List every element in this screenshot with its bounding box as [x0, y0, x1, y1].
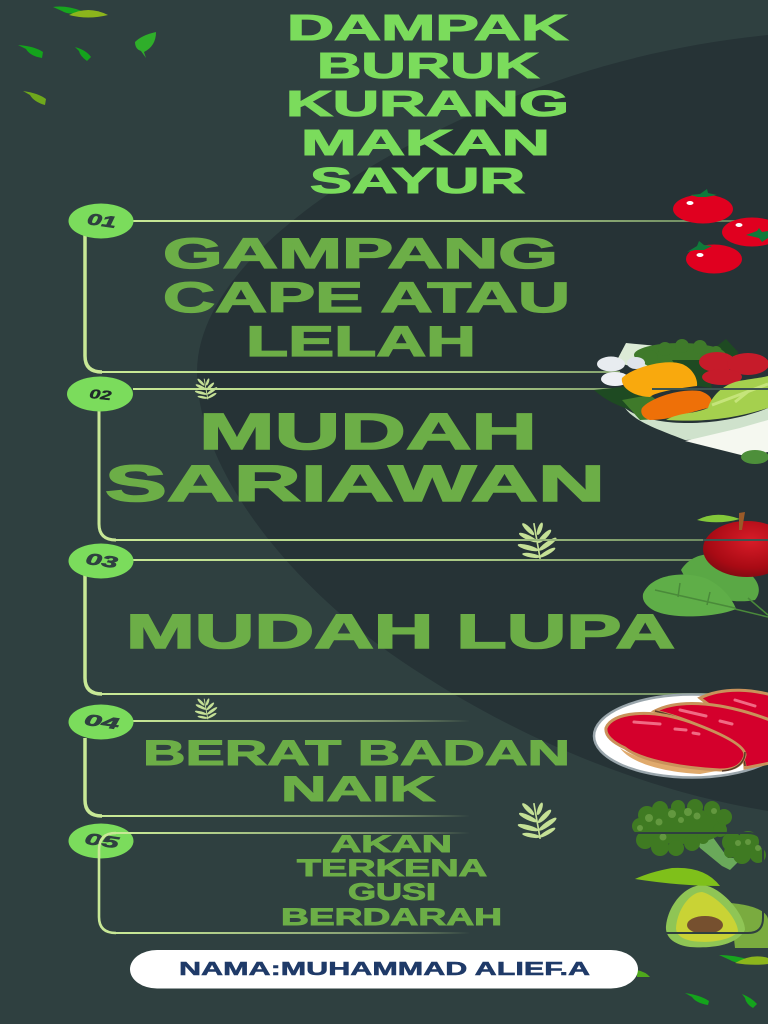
heading 01: GAMPANG [163, 230, 558, 278]
heading 04 [143, 734, 570, 809]
icon: apple with leaves [643, 512, 768, 617]
panel: item 02 [67, 376, 768, 540]
icon: avocado [635, 868, 768, 948]
number badge 03 [68, 544, 134, 578]
connector frame 02 [116, 389, 768, 540]
heading 04: NAIK [281, 770, 435, 809]
title: MAKAN [301, 122, 550, 163]
heading 01 [163, 230, 570, 366]
heading 05: AKAN [331, 831, 452, 858]
icon: palm sprig 1 [192, 375, 220, 401]
leaves: top left [18, 6, 156, 105]
heading 01: LELAH [246, 318, 476, 366]
number badge 04: 04 [83, 712, 120, 733]
heading 05: GUSI [348, 879, 436, 906]
number badge 05: 05 [84, 831, 122, 853]
heading 05: BERDARAH [281, 904, 502, 931]
icon: broccoli [632, 799, 766, 870]
heading 04: BERAT BADAN [143, 734, 570, 773]
dark lines over food [652, 389, 768, 540]
heading 02: MUDAH [199, 403, 537, 460]
connector frame 01 [100, 221, 768, 372]
connector frame 03 [102, 560, 768, 694]
heading 03: MUDAH LUPA [126, 606, 675, 659]
panel: item 05 [68, 824, 502, 933]
number badge 03: 03 [85, 551, 119, 572]
heading 02: SARIAWAN [105, 455, 605, 512]
icon: plate of jam toast [594, 690, 768, 778]
right edge outline over food [630, 833, 763, 933]
icon: salad bowl [594, 339, 768, 464]
heading 05 [281, 831, 502, 931]
heading 05: TERKENA [297, 855, 487, 882]
number badge 05 [68, 824, 134, 858]
panel: item 01 [68, 204, 768, 372]
dark background arc [197, 35, 768, 811]
number badge 04 [68, 704, 134, 740]
title: BURUK [317, 45, 539, 86]
icon: palm sprig 4 [513, 796, 561, 843]
number badge 01: 01 [86, 211, 117, 232]
heading 02 [105, 403, 605, 512]
title [286, 7, 569, 201]
number badge 02: 02 [89, 386, 113, 403]
connector frame 04 [102, 721, 470, 816]
icon: palm sprig 2 [513, 516, 561, 563]
name pill: NAMA:MUHAMMAD ALIEF.A [179, 958, 590, 979]
title: KURANG [286, 83, 569, 124]
panel: item 04 [68, 704, 570, 816]
number badge 01 [68, 204, 134, 238]
leaves: bottom right [637, 955, 768, 1008]
name pill [130, 950, 638, 988]
icon: tomatoes [673, 189, 768, 274]
heading 01: CAPE ATAU [163, 274, 570, 322]
title: SAYUR [310, 160, 525, 201]
icon: palm sprig 3 [192, 695, 220, 721]
number badge 02 [67, 376, 133, 412]
title: DAMPAK [287, 7, 568, 48]
panel: item 03 [68, 544, 768, 694]
connector frame 05 [116, 833, 470, 933]
